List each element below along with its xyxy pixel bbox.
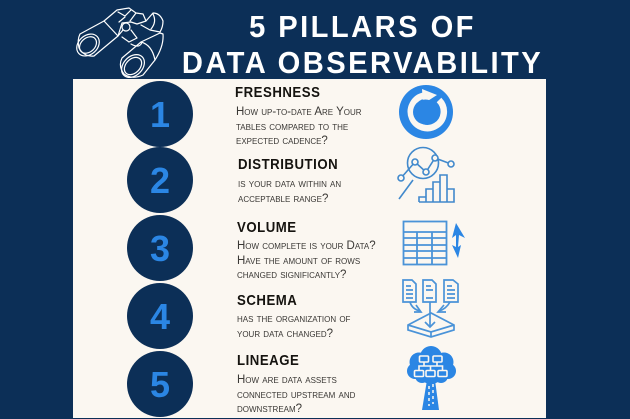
number circle 5: [127, 351, 193, 417]
text: freshness: expected cadence?: [236, 135, 328, 147]
heading: lineage: LINEAGE: [237, 352, 299, 369]
text: freshness: [236, 106, 362, 147]
number circle 1: 1: [150, 94, 170, 135]
number circle 2: [127, 147, 193, 213]
text: volume: [237, 240, 376, 281]
icon: refresh: [399, 85, 453, 139]
title: [182, 9, 543, 80]
text: distribution: is your data within an: [238, 178, 341, 190]
heading: freshness: FRESHNESS: [235, 84, 320, 101]
title: 5 PILLARS OF: [249, 9, 476, 44]
icon: binoculars: [76, 7, 164, 78]
icon: lineage tree: [407, 346, 456, 410]
number circle 1: [127, 81, 193, 147]
number circle 4: 4: [150, 296, 170, 337]
icon: schema documents: [402, 279, 459, 338]
text: volume: changed significantly?: [237, 269, 346, 281]
heading: schema: SCHEMA: [237, 292, 297, 309]
heading: volume: VOLUME: [237, 219, 297, 236]
number circle 2: 2: [150, 160, 170, 201]
text: lineage: downstream?: [237, 403, 302, 415]
number circle 4: [127, 283, 193, 349]
text: distribution: [238, 178, 341, 205]
text: schema: [237, 313, 350, 340]
text: freshness: How up-to-date Are Your: [236, 106, 362, 118]
number circle 5: 5: [150, 364, 170, 405]
text: schema: has the organization of: [237, 313, 350, 325]
icon: magnifier chart: [397, 146, 455, 203]
text: lineage: [237, 374, 355, 415]
heading: distribution: DISTRIBUTION: [238, 156, 338, 173]
text: lineage: connected upstream and: [237, 389, 355, 401]
text: lineage: How are data assets: [237, 374, 337, 386]
text: freshness: tables compared to the: [236, 121, 348, 133]
text: volume: How complete is your Data?: [237, 240, 376, 252]
title: DATA OBSERVABILITY: [182, 44, 543, 80]
main panel: [73, 79, 546, 418]
icon: table with arrows: [402, 220, 465, 266]
number circle 3: 3: [150, 228, 170, 269]
number circle 3: [127, 215, 193, 281]
text: schema: your data changed?: [237, 328, 333, 340]
text: volume: Have the amount of rows: [237, 255, 360, 267]
text: distribution: acceptable range?: [238, 193, 328, 205]
